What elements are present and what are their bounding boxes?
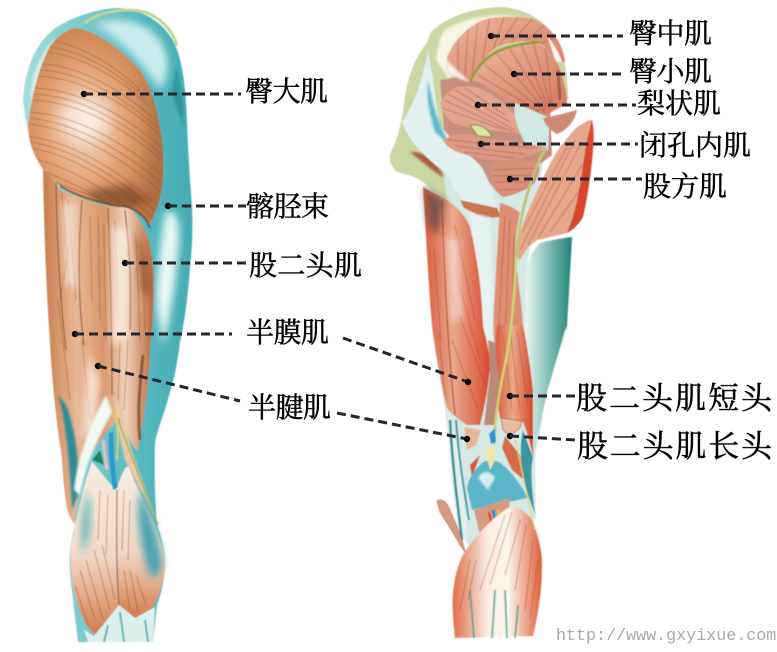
leader: biceps short head [507,393,575,399]
leader: biceps femoris [122,260,248,266]
label: 髂胫束: 髂胫束 [246,191,329,223]
blue shading: medial calf [81,490,91,555]
illustration: right leg, deep posterior muscles [390,7,594,638]
tendon: white central strip [470,213,493,380]
tendon: cut semitendinosus stub [464,427,481,450]
muscle division [442,200,455,415]
crest: green iliac rim [85,10,177,46]
leaders: dashed lines with dots [72,33,642,442]
label: 股二头肌短头: 股二头肌短头 [576,381,773,416]
leader: semimembranosus left [72,331,232,337]
shadow: glute lower fold [85,185,150,210]
nerve: lower knee tendon yellow line [515,440,535,530]
bone: cut trochanter end [543,110,577,134]
muscle: gluteus medius [446,14,565,82]
shadow: glute lateral shading [138,84,164,216]
band: iliotibial tract [525,237,572,458]
label: 半膜肌: 半膜肌 [246,317,329,349]
dark shadow at upper origin [424,188,445,235]
ankle teal streaks [470,590,518,638]
blue shading: lateral calf [138,490,162,577]
tendons: teal behind the knee [58,395,112,510]
muscle: semimembranosus and long head [423,187,490,425]
nerve: yellow-green sciatic line [494,255,516,445]
vessels: popliteal artery and vein [474,428,510,535]
glute lower edge [60,186,150,228]
shadow: dark streak lower thigh [139,355,143,440]
ankle: achilles tendon [84,605,155,642]
leader: gluteus medius [488,33,623,39]
bone: pelvis green outline [390,7,568,200]
band: iliotibial tract highlight [156,211,179,345]
highlight: thigh pale stripes [62,200,128,440]
muscle: quadratus femoris [490,160,540,197]
muscle: hamstrings [43,167,153,525]
ankle: teal streaks [104,612,148,642]
leader: semitendinosus right [337,413,470,442]
label: 臀大肌: 臀大肌 [245,76,328,108]
label: 股方肌: 股方肌 [643,171,727,203]
leader: semimembranosus right [343,338,471,385]
label: 半腱肌: 半腱肌 [248,392,331,424]
leader: gluteus maximus [81,91,241,97]
muscle: gluteus maximus [28,28,170,228]
muscle: lower adductor strip [484,340,500,425]
muscle: reflected gluteus maximus [515,120,594,260]
illustration: left leg, superficial posterior muscles [23,8,192,642]
fascia: teal outer layer of hip and thigh [23,8,192,642]
highlight: glute centre [59,96,111,140]
leader: semitendinosus left [95,363,240,401]
fibre lines [58,195,145,420]
muscle: gastrocnemius right [453,505,542,638]
muscle divisions [56,182,131,395]
highlight: upper right fascia [95,20,168,90]
label: 梨状肌: 梨状肌 [637,88,721,120]
leader: biceps long head [507,433,575,440]
popliteal: teal fossa [467,446,527,510]
muscle: piriformis [440,86,548,145]
tendon: sartorius loop [437,500,465,552]
muscle: obturator internus [443,125,547,161]
muscle: small stripes of plantaris [470,455,480,478]
popliteal: vessels [92,410,158,525]
label: 股二头肌: 股二头肌 [249,250,362,282]
muscle: right hamstring to knee [114,395,156,520]
base: pale tissue behind the whole thigh and knee [423,150,572,550]
muscle: adductor magnus [493,203,523,350]
ligament: white fan to trochanter [514,103,550,152]
tendon: cut end [460,200,501,218]
leader: obturator internus [478,141,638,147]
label: 臀小肌: 臀小肌 [629,56,712,88]
bone: yellow-green ischial spine [470,125,492,137]
bone: dark cavity on ischium [410,152,444,178]
leader: piriformis [475,102,636,108]
tendon: cut biceps stub [501,418,522,436]
leader: iliotibial tract [165,203,246,209]
watermark: site URL: http://www.gxyixue.com [556,627,776,646]
label: 臀中肌: 臀中肌 [629,18,712,50]
highlight: pale strip on the muscle [446,235,462,320]
muscle: biceps long head remainder [502,436,524,480]
muscle: gastrocnemius [70,462,165,634]
highlight: pale rim inside the pelvis [436,15,530,80]
ligament: sacrotuberous white-blue [402,52,496,212]
tendons: medial knee teal-white [437,408,535,552]
glute fibre lines [28,40,168,225]
leader: gluteus minimus [511,71,626,77]
ligament: blue shading [427,80,450,145]
muscle: biceps femoris short head [496,325,533,458]
highlight: white fascia at base [446,60,470,82]
leader: quadratus femoris [507,176,642,182]
label: 闭孔内肌: 闭孔内肌 [639,130,751,162]
highlight: pale left hip fascia [31,38,55,110]
muscle: gluteus minimus [470,42,567,114]
bone: yellow femoral edge [485,446,495,470]
shadow: dark streak near band [135,230,150,300]
label: 股二头肌长头: 股二头肌长头 [577,429,773,464]
deep tissue: behind small hip muscles [440,75,552,195]
semitendinosus / semimembranosus mass [43,167,153,525]
band: darker teal side streak [172,66,184,125]
